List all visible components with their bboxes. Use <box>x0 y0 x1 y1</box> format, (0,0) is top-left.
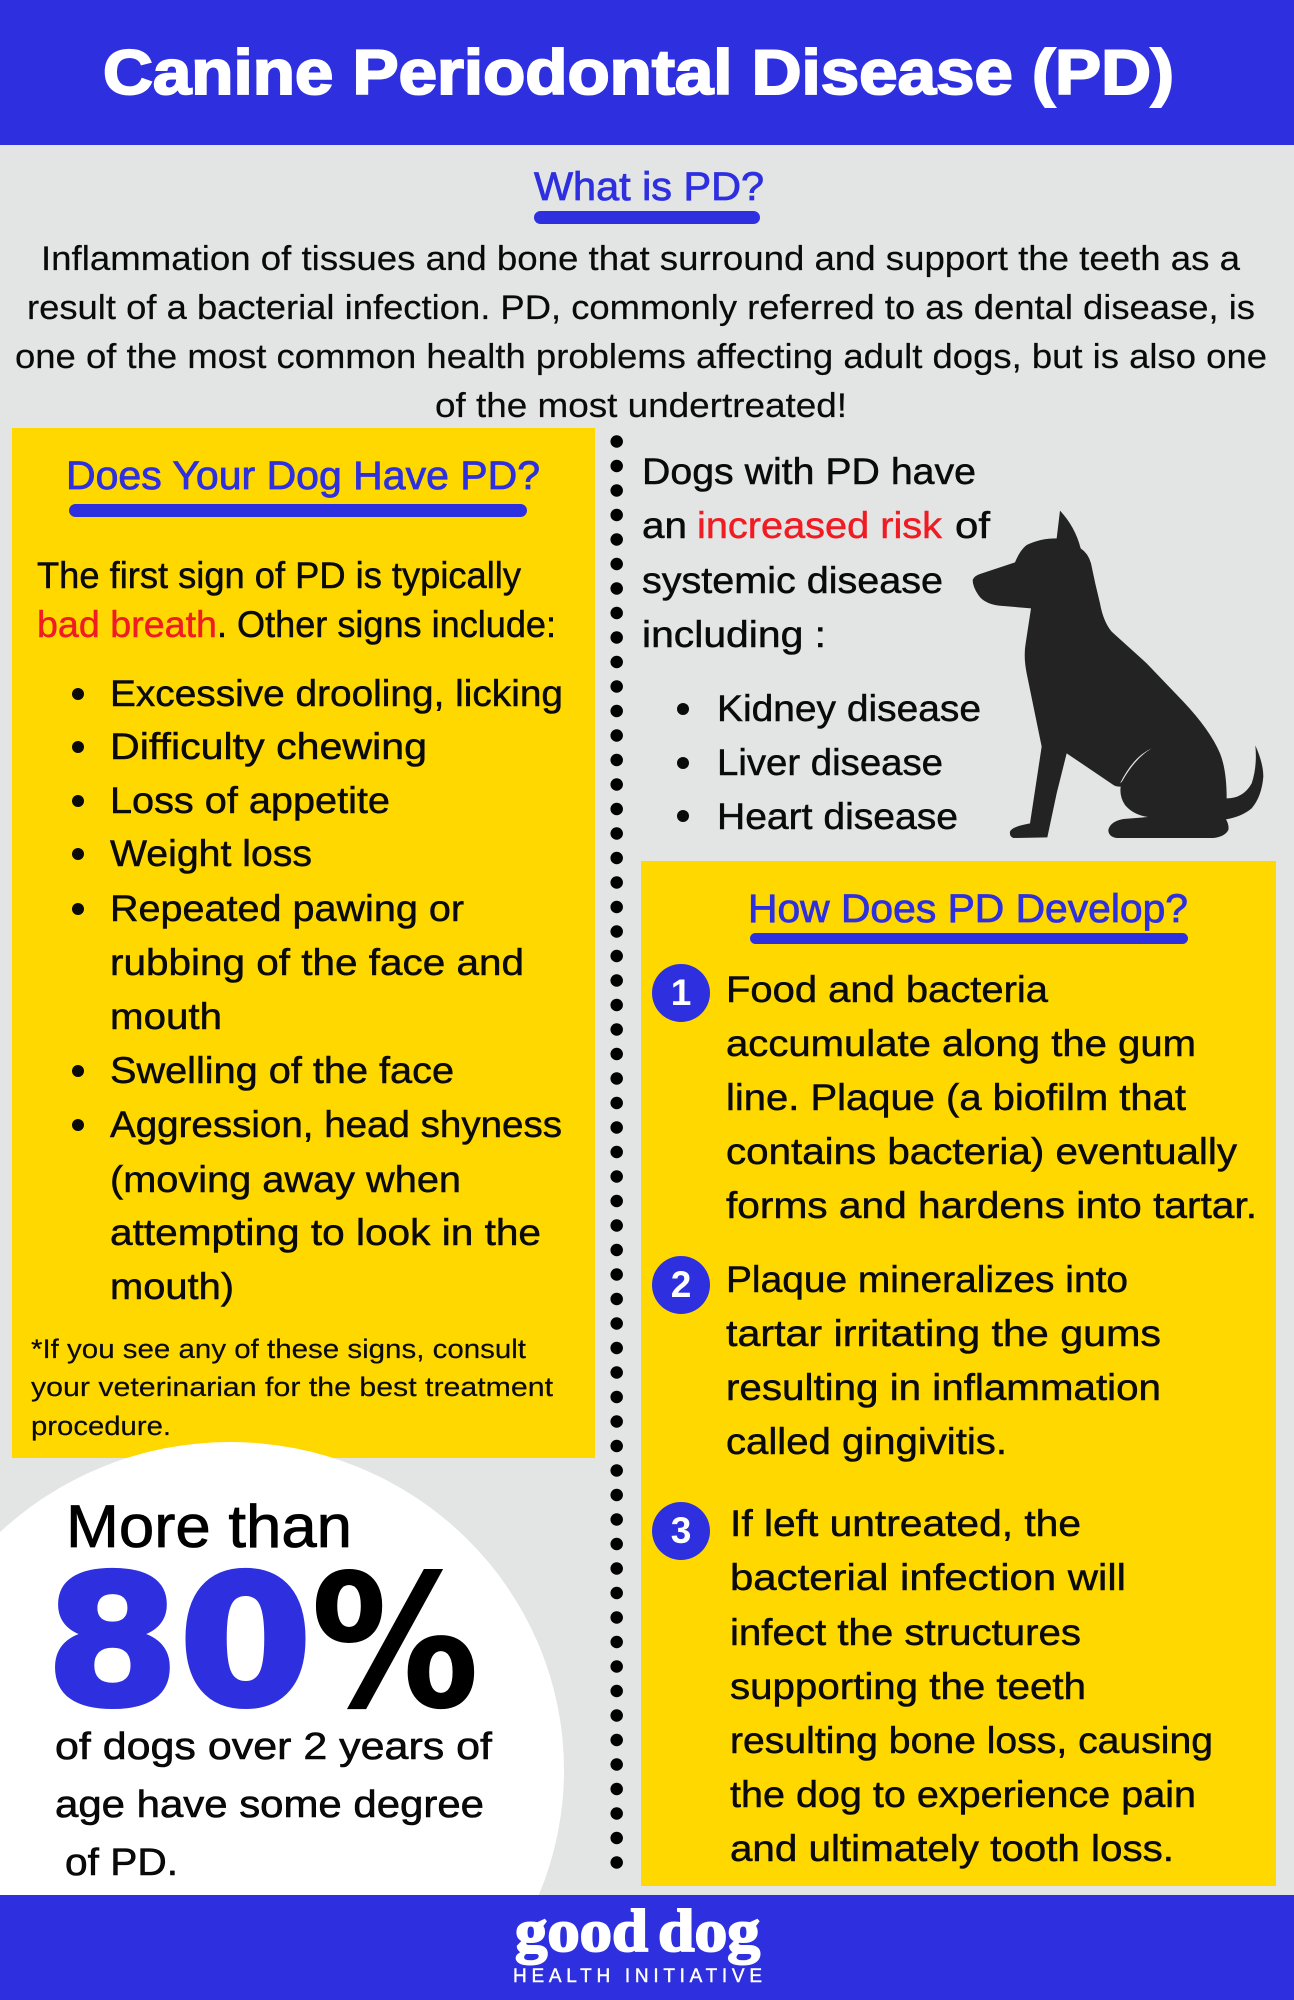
signs list: Swelling of the face <box>110 1050 454 1091</box>
step 3: infect the structures <box>730 1612 1081 1653</box>
signs list <box>72 673 563 1307</box>
step 1: forms and hardens into tartar. <box>726 1185 1257 1226</box>
step 3: If left untreated, the <box>730 1503 1081 1544</box>
step 2: 2 <box>671 1264 691 1305</box>
definition paragraph: one of the most common health problems affecting adult dogs, but is also one <box>15 338 1267 376</box>
risk text: including : <box>642 614 826 655</box>
percent sign: % <box>311 1536 479 1750</box>
step 3: the dog to experience pain <box>730 1774 1196 1815</box>
intro text: The first sign of PD is typically <box>37 555 521 596</box>
signs list: attempting to look in the <box>110 1212 541 1253</box>
risk text: systemic disease <box>642 560 943 601</box>
panel: does your dog have PD <box>12 428 595 1458</box>
step 3 <box>652 1502 1213 1869</box>
step 1: Food and bacteria <box>726 969 1048 1010</box>
signs list: (moving away when <box>110 1159 461 1200</box>
footnote <box>31 1334 554 1441</box>
logo: good dog health initiative: dog <box>658 1898 760 1964</box>
intro text: . Other signs include: <box>217 604 556 645</box>
risk text: of <box>955 505 991 546</box>
dotted column divider <box>610 442 623 1870</box>
disease list <box>677 688 981 837</box>
section: systemic disease risk <box>642 451 1263 838</box>
number: 80: 80 <box>46 1538 312 1747</box>
definition paragraph <box>15 240 1267 425</box>
footer band <box>0 1895 1294 2000</box>
intro text <box>37 555 556 645</box>
statistic text: age have some degree <box>55 1784 484 1826</box>
statistic text <box>55 1726 492 1884</box>
step 1: contains bacteria) eventually <box>726 1131 1238 1172</box>
signs list: Aggression, head shyness <box>110 1104 562 1145</box>
signs list: Repeated pawing or <box>110 888 464 929</box>
disease list: Liver disease <box>717 742 943 783</box>
intro text: bad breath <box>37 604 217 645</box>
panel: how does PD develop <box>641 861 1276 1886</box>
step 3: bacterial infection will <box>730 1557 1126 1598</box>
step 2: tartar irritating the gums <box>726 1313 1161 1354</box>
statistic text: of PD. <box>65 1842 178 1884</box>
logo: good dog health initiative: good <box>515 1898 648 1964</box>
heading: does your dog have PD <box>66 454 540 517</box>
step 2: resulting in inflammation <box>726 1367 1161 1408</box>
heading: does your dog have PD: Does Your Dog Have PD? <box>66 454 540 498</box>
signs list: Excessive drooling, licking <box>110 673 563 714</box>
signs list: mouth) <box>110 1266 234 1307</box>
step 2: called gingivitis. <box>726 1421 1007 1462</box>
section: what is PD <box>15 165 1267 425</box>
step 2 <box>652 1256 1161 1462</box>
logo: good dog health initiative <box>513 1898 762 1987</box>
text: more than: More than <box>66 1493 352 1560</box>
definition paragraph: Inflammation of tissues and bone that surround and support the teeth as a <box>41 240 1240 278</box>
disease list: Heart disease <box>717 796 958 837</box>
signs list: Weight loss <box>110 833 312 874</box>
step 1: line. Plaque (a biofilm that <box>726 1077 1187 1118</box>
step 1 <box>652 964 1257 1226</box>
step 3: 3 <box>671 1510 691 1551</box>
header band <box>0 0 1294 145</box>
step 1: 1 <box>671 972 691 1013</box>
footnote: procedure. <box>31 1411 171 1441</box>
footnote: your veterinarian for the best treatment <box>31 1372 554 1402</box>
disease list: Kidney disease <box>717 688 981 729</box>
step 3: supporting the teeth <box>730 1666 1086 1707</box>
step 3: resulting bone loss, causing <box>730 1720 1213 1761</box>
signs list: rubbing of the face and <box>110 942 524 983</box>
step 3: and ultimately tooth loss. <box>730 1828 1174 1869</box>
risk text <box>642 451 991 655</box>
risk text: Dogs with PD have <box>642 451 976 492</box>
title: Canine Periodontal Disease (PD) <box>103 38 1174 108</box>
signs list: Loss of appetite <box>110 780 390 821</box>
icon: sitting dog silhouette <box>973 511 1263 838</box>
panel: 80 percent statistic <box>0 1442 564 2000</box>
heading: what is PD: What is PD? <box>534 165 764 209</box>
definition paragraph: result of a bacterial infection. PD, commonly referred to as dental disease, is <box>27 289 1255 327</box>
step 2: Plaque mineralizes into <box>726 1259 1128 1300</box>
risk text: increased risk <box>697 505 943 546</box>
step 1: accumulate along the gum <box>726 1023 1196 1064</box>
footnote: *If you see any of these signs, consult <box>31 1334 527 1364</box>
heading: how does PD develop: How Does PD Develop? <box>748 887 1188 931</box>
risk text: an <box>642 505 687 546</box>
white circle background <box>0 1442 564 2000</box>
signs list: Difficulty chewing <box>110 726 427 767</box>
statistic text: of dogs over 2 years of <box>55 1726 492 1768</box>
signs list: mouth <box>110 996 222 1037</box>
logo: good dog health initiative: HEALTH INITIATIVE <box>513 1966 762 1987</box>
definition paragraph: of the most undertreated! <box>435 387 847 425</box>
